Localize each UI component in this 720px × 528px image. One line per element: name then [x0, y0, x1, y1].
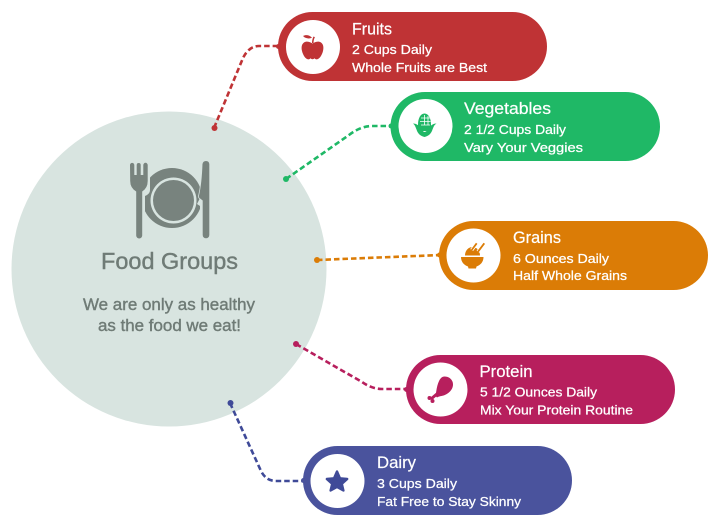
- text: protein label: Protein: [480, 363, 532, 381]
- text: protein label: 5 1/2 Ounces Daily: [480, 384, 597, 400]
- icon: chicken drumstick: [428, 376, 453, 403]
- text: fruits label: Fruits: [352, 20, 392, 38]
- icon: corn: [413, 114, 436, 137]
- text: dairy label: 3 Cups Daily: [377, 476, 457, 491]
- connector: vegetables: [283, 126, 392, 182]
- text: vegetables label: 2 1/2 Cups Daily: [464, 122, 566, 137]
- heading: Food Groups: Food Groups: [101, 248, 238, 274]
- text: dairy label: [377, 454, 521, 509]
- text: tagline: We are only as healthy: [83, 296, 256, 314]
- text: vegetables label: [464, 100, 583, 155]
- icon: apple: [302, 35, 323, 59]
- panel: dairy: [301, 446, 572, 515]
- icon: rice bowl: [461, 243, 484, 268]
- text: grains label: 6 Ounces Daily: [513, 251, 609, 266]
- panel: grains: [437, 221, 708, 290]
- panel: protein: [404, 355, 675, 424]
- text: fruits label: [352, 20, 487, 75]
- text: tagline: as the food we eat!: [98, 317, 241, 335]
- text: dairy label: Fat Free to Stay Skinny: [377, 494, 521, 509]
- connector: protein: [293, 341, 408, 389]
- panel: fruits: [276, 12, 547, 81]
- icon: plate with fork and knife: [130, 161, 209, 238]
- text: dairy label: Dairy: [377, 454, 417, 472]
- text: fruits label: Whole Fruits are Best: [352, 60, 487, 75]
- icon: star: [327, 472, 347, 490]
- panel: vegetables: [388, 92, 660, 161]
- text: tagline: [83, 296, 256, 335]
- text: protein label: Mix Your Protein Routine: [480, 402, 633, 418]
- text: fruits label: 2 Cups Daily: [352, 42, 432, 57]
- text: protein label: [480, 363, 633, 418]
- connector: dairy: [228, 400, 305, 481]
- text: vegetables label: Vary Your Veggies: [464, 140, 583, 155]
- text: vegetables label: Vegetables: [464, 100, 551, 118]
- text: grains label: Grains: [513, 229, 561, 247]
- text: grains label: Half Whole Grains: [513, 268, 627, 283]
- central circle panel: [12, 112, 326, 426]
- connector: fruits: [212, 46, 280, 131]
- connector: grains: [314, 255, 441, 263]
- text: grains label: [513, 229, 627, 283]
